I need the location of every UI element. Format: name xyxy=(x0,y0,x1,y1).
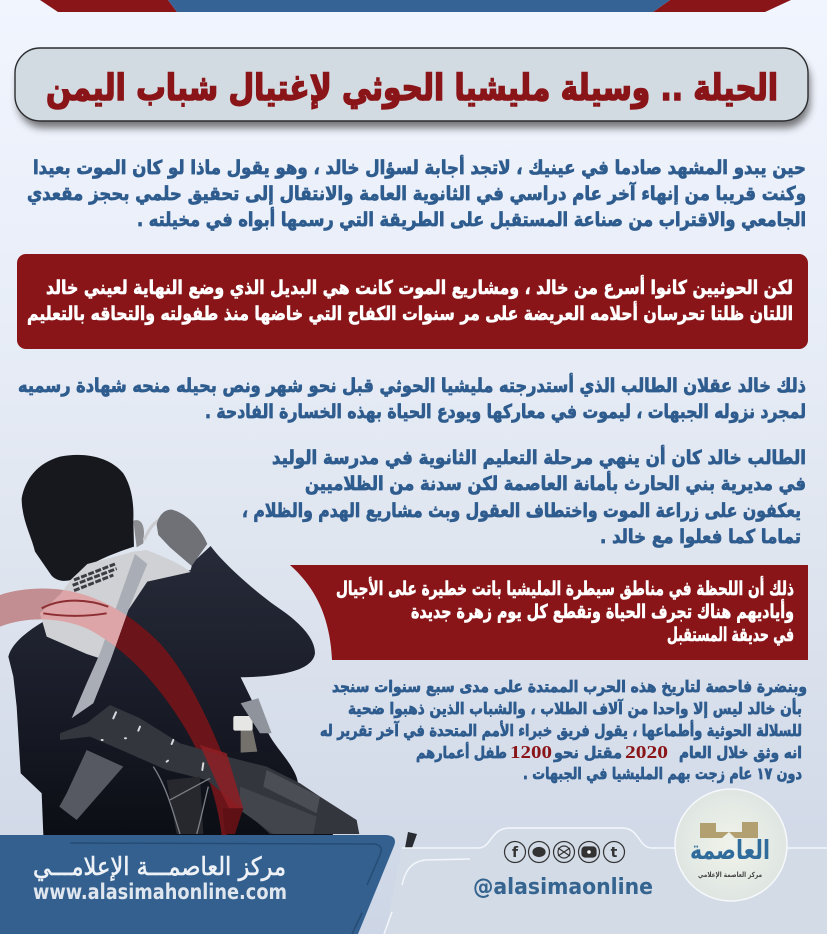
website: www.alasimahonline.com xyxy=(33,880,287,904)
rifle handguard xyxy=(263,770,320,813)
panel: red callout 2 xyxy=(290,565,808,660)
icon letters xyxy=(512,845,618,861)
hand xyxy=(157,510,207,566)
paragraph: statistics: مقتل نحو xyxy=(553,743,622,762)
logo word: العاصمة xyxy=(690,836,770,866)
paragraph: khaled xyxy=(18,373,806,423)
icon letters: f xyxy=(512,845,519,861)
scarf pattern xyxy=(73,564,117,591)
figure: 2020: 2020 xyxy=(625,742,668,762)
logo caption: مركز العاصمة الإعلامي xyxy=(698,871,762,879)
paragraph: statistics: انه وثق خلال العام xyxy=(679,743,802,762)
scarf loop xyxy=(144,517,167,540)
panel: website footer xyxy=(0,835,395,934)
rifle forend xyxy=(240,787,317,834)
rifle muzzle xyxy=(404,832,417,853)
red tail xyxy=(223,808,243,834)
paragraph: statistics: طفل أعمارهم xyxy=(416,742,507,762)
head xyxy=(22,455,134,581)
rifle grip xyxy=(59,750,123,820)
rifle highlights xyxy=(102,712,203,770)
red arc over rifle xyxy=(200,745,243,810)
logo buildings xyxy=(700,822,758,838)
icon letters: t xyxy=(611,845,618,861)
red arc over jacket xyxy=(116,616,242,835)
rifle sling xyxy=(153,767,210,834)
bottle cap xyxy=(233,716,253,731)
title banner xyxy=(15,48,810,128)
rifle magazine xyxy=(167,777,203,834)
paragraph: statistics: دون ١٧ عام زجت بهم المليشيا في الجبهات . xyxy=(523,764,802,784)
paragraph: student xyxy=(242,445,806,548)
social icons xyxy=(504,842,624,862)
gray strap at bottle xyxy=(241,698,272,733)
scarf red folds xyxy=(42,601,108,616)
top ribbon xyxy=(40,0,791,12)
logo badge xyxy=(675,789,787,901)
bottle xyxy=(241,730,257,753)
figure: 1200: 1200 xyxy=(510,742,552,762)
paragraph: statistics xyxy=(320,677,807,784)
paragraph: student: تماما كما فعلوا مع خالد . xyxy=(600,526,801,548)
red arc over scarf xyxy=(40,590,126,646)
jacket xyxy=(8,546,333,835)
social handle: @alasimaonline xyxy=(473,875,653,900)
center name: مركز العاصمـــة الإعلامـــي xyxy=(33,852,286,881)
scarf xyxy=(40,550,191,662)
figure: fighter with rifle xyxy=(0,455,359,835)
strap xyxy=(72,554,147,718)
red arc behind figure xyxy=(0,589,243,835)
rifle body xyxy=(60,705,359,834)
paragraph: opening xyxy=(27,155,806,231)
panel: red callout 1 xyxy=(17,254,808,349)
ear and fingers xyxy=(133,520,144,547)
panel: social footer xyxy=(384,828,827,934)
